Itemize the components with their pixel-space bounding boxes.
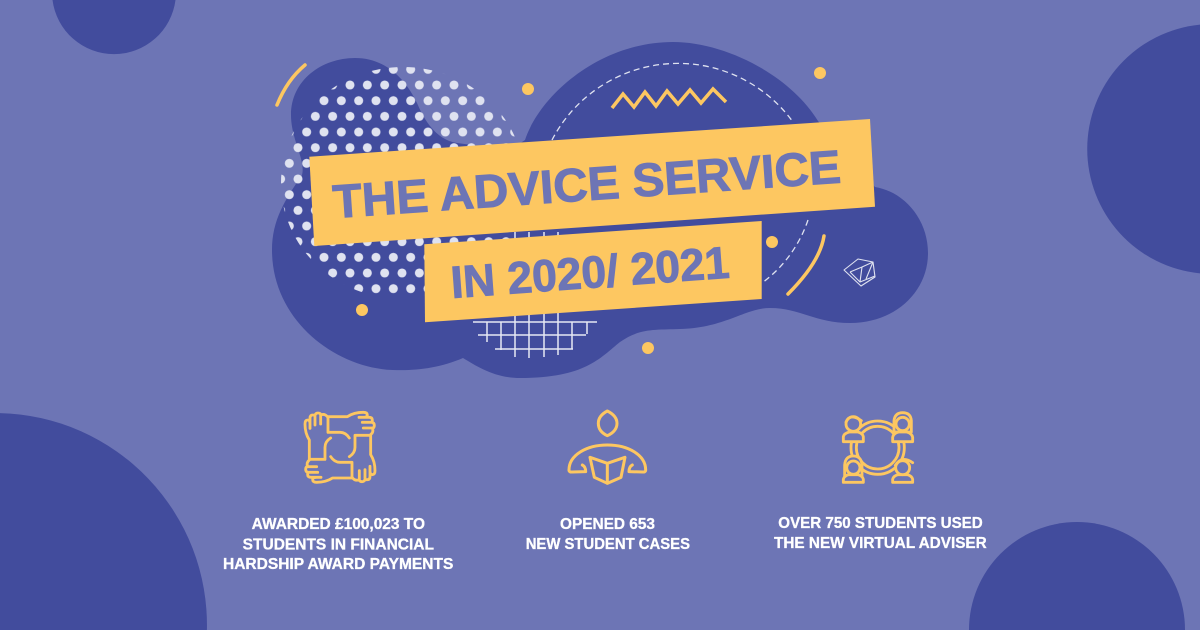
text: hardship award payments: HARDSHIP AWARD PAYMENTS (223, 556, 453, 573)
banner: in 2020/2021 (424, 221, 762, 322)
text: virtual adviser: THE NEW VIRTUAL ADVISER (774, 535, 987, 552)
title line one: THE ADVICE SERVICE (331, 140, 842, 228)
yellow zigzag (612, 89, 726, 108)
icon: person reading book (569, 411, 646, 483)
text: hardship award payments: STUDENTS IN FINANCIAL (243, 536, 434, 554)
text: new student cases (526, 516, 690, 553)
icon: gem outline (844, 259, 875, 286)
central blob (272, 42, 928, 378)
white grid decoration (473, 232, 597, 358)
circle: right (1087, 25, 1200, 273)
yellow arc: right (788, 236, 824, 294)
circle: bottom left (0, 413, 207, 630)
icon: four people around circle (843, 413, 913, 482)
text: hardship award payments: AWARDED £100,023 TO (252, 516, 425, 533)
title line two: IN 2020/ 2021 (449, 237, 731, 308)
circle: top left (52, 0, 176, 54)
text: virtual adviser (774, 515, 987, 552)
yellow arc: top left (277, 65, 305, 105)
halftone dot circle (281, 67, 525, 299)
text: new student cases: NEW STUDENT CASES (526, 536, 690, 553)
text: virtual adviser: OVER 750 STUDENTS USED (778, 515, 983, 532)
yellow dots (356, 67, 826, 354)
text: hardship award payments (223, 516, 453, 573)
banner: the advice service (309, 119, 875, 246)
icon: four linked hands (305, 412, 375, 482)
circle: bottom right (969, 522, 1185, 630)
dashed circle (552, 63, 808, 283)
text: new student cases: OPENED 653 (560, 516, 655, 533)
